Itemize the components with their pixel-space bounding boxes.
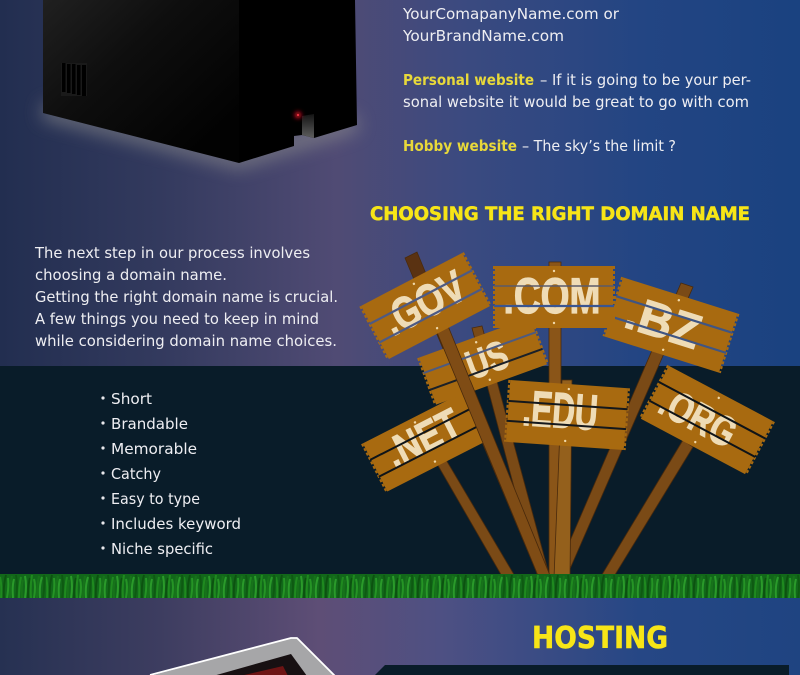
bullet list: domain name qualities: Easy to type <box>111 490 200 508</box>
sign: .NET: .NET <box>378 399 469 477</box>
text block: domain name advice: – If it is going to be your per- <box>540 71 751 89</box>
heading: choosing the right domain name: CHOOSING THE RIGHT DOMAIN NAME <box>370 203 750 225</box>
icon: laptop lid <box>150 638 335 675</box>
dark band background <box>0 366 800 578</box>
bullet list: domain name qualities: Memorable <box>111 440 197 458</box>
bullet list: domain name qualities: Includes keyword <box>111 515 241 533</box>
text block: domain name intro: choosing a domain name. <box>35 266 227 284</box>
sign: .BZ <box>604 277 738 373</box>
lower section background <box>0 597 800 675</box>
bullet list: domain name qualities: Niche specific <box>111 540 213 558</box>
text block: domain name advice: – The sky’s the limit ? <box>522 137 676 155</box>
text block: domain name intro: The next step in our process involves <box>34 244 310 262</box>
sign: .US <box>418 317 548 405</box>
text block: domain name intro: Getting the right domain name is crucial. <box>35 288 338 306</box>
bullet list: domain name qualities: Short <box>111 390 152 408</box>
heading: hosting: HOSTING <box>532 621 668 656</box>
sign: .ORG: .ORG <box>652 378 745 457</box>
text block: domain name advice <box>402 5 751 155</box>
illustration: wooden domain signs <box>360 252 774 578</box>
sign: .BZ: .BZ <box>619 286 707 360</box>
text block: domain name advice: Personal website <box>403 71 534 89</box>
upper section background <box>0 0 800 366</box>
text block: domain name advice: sonal website it would be great to go with com <box>403 93 749 111</box>
sign: .US: .US <box>452 333 514 391</box>
bullet list: domain name qualities: Catchy <box>111 465 161 483</box>
bullet list: domain name qualities: Brandable <box>111 415 188 433</box>
panel: hosting dark panel <box>375 665 789 675</box>
sign: .COM: .COM <box>504 268 600 324</box>
GOV post front segment <box>436 326 551 578</box>
sign: .GOV: .GOV <box>374 260 474 345</box>
text block: domain name intro: while considering domain name choices. <box>35 332 337 350</box>
text block: domain name advice: YourComapanyName.com or <box>402 5 620 23</box>
text block: domain name intro <box>34 244 338 350</box>
grass strip <box>0 574 800 598</box>
sign: .EDU: .EDU <box>521 380 600 441</box>
bullet list: domain name qualities <box>101 390 241 558</box>
text block: domain name advice: YourBrandName.com <box>402 27 564 45</box>
text block: domain name intro: A few things you need to keep in mind <box>35 310 319 328</box>
icon: server tower <box>43 0 357 163</box>
text block: domain name advice: Hobby website <box>403 137 517 155</box>
posts behind signs <box>405 252 693 578</box>
